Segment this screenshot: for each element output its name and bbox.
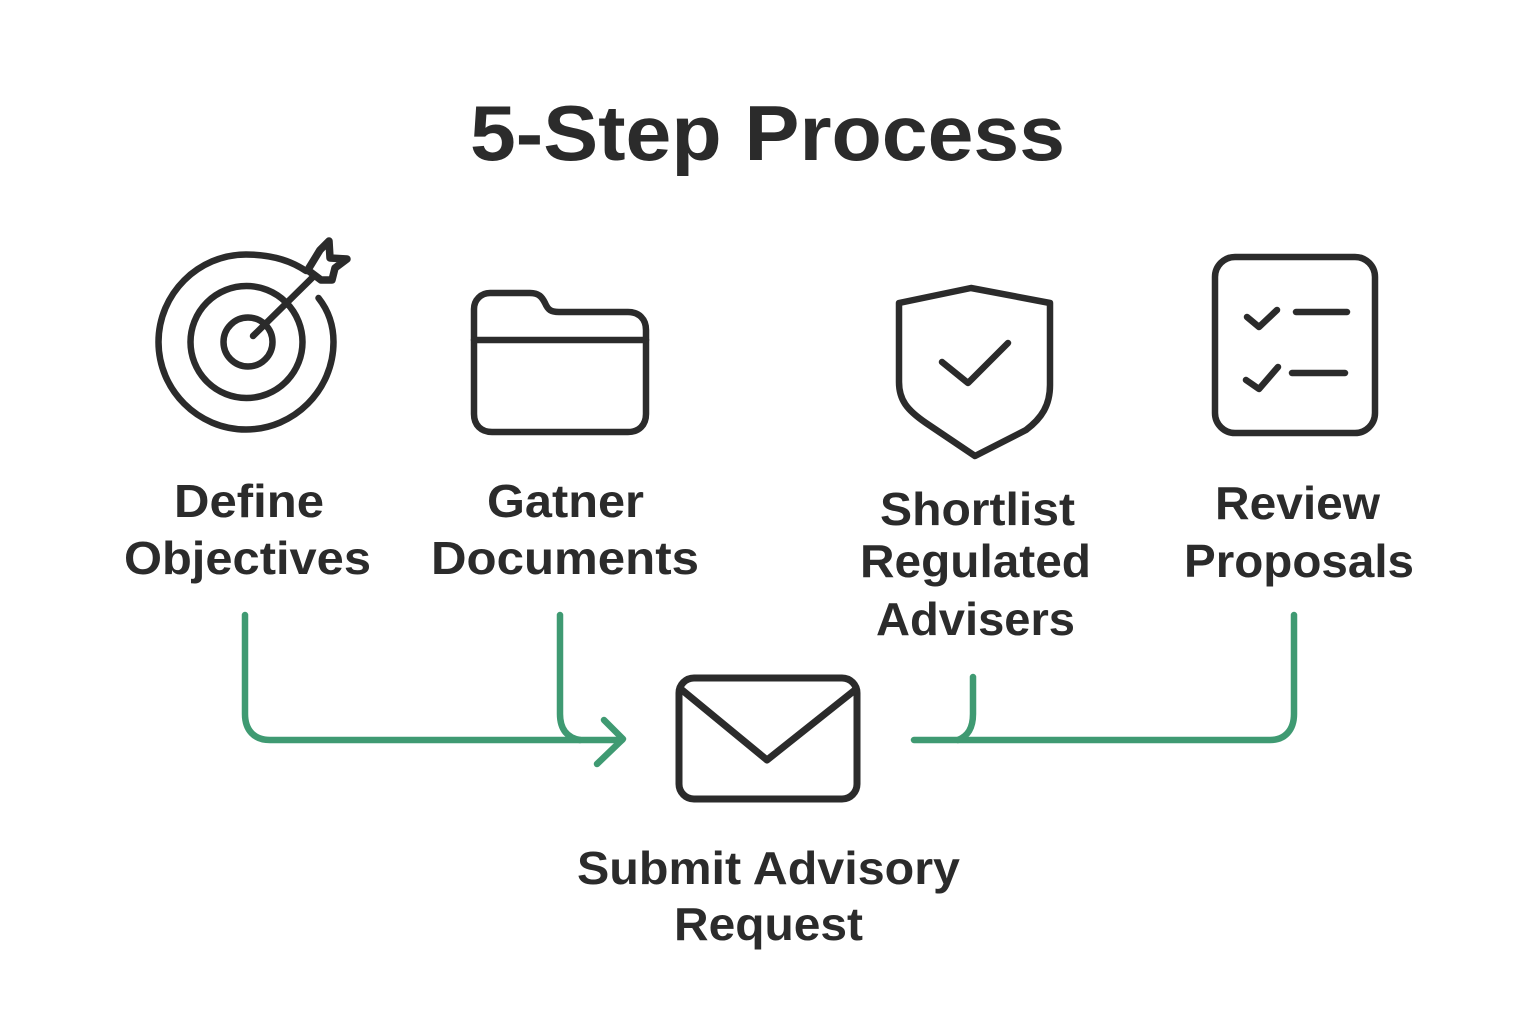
label: shortlist regulated advisers: Regulated [860, 535, 1091, 587]
label: review proposals [1184, 477, 1414, 587]
title: 5-Step Process [470, 89, 1065, 177]
step 3: shortlist regulated advisers [860, 288, 1091, 645]
label: gatner documents: Gatner [487, 475, 644, 527]
label: gatner documents [431, 475, 699, 584]
icon: target with arrow [158, 241, 347, 430]
step 4: review proposals [1184, 257, 1414, 587]
icon: checklist [1215, 257, 1375, 433]
step 5: submit advisory request [577, 678, 960, 950]
icon: envelope [679, 678, 857, 799]
label: shortlist regulated advisers: Shortlist [880, 483, 1075, 535]
arrow: left branch into submit [245, 615, 623, 764]
label: submit advisory request: Request [674, 898, 863, 950]
icon: shield with check [899, 288, 1050, 456]
step 1: define objectives [124, 241, 371, 584]
label: submit advisory request [577, 842, 960, 950]
label: shortlist regulated advisers [860, 483, 1091, 645]
label: review proposals: Review [1215, 477, 1380, 529]
label: define objectives [124, 475, 371, 584]
label: submit advisory request: Submit Advisory [577, 842, 960, 894]
label: shortlist regulated advisers: Advisers [876, 593, 1075, 645]
label: define objectives: Define [174, 475, 324, 527]
step 2: gather documents [431, 293, 699, 584]
label: review proposals: Proposals [1184, 535, 1414, 587]
label: gatner documents: Documents [431, 532, 699, 584]
label: define objectives: Objectives [124, 532, 371, 584]
arrow: right branch into submit [914, 615, 1294, 740]
icon: folder [474, 293, 646, 432]
